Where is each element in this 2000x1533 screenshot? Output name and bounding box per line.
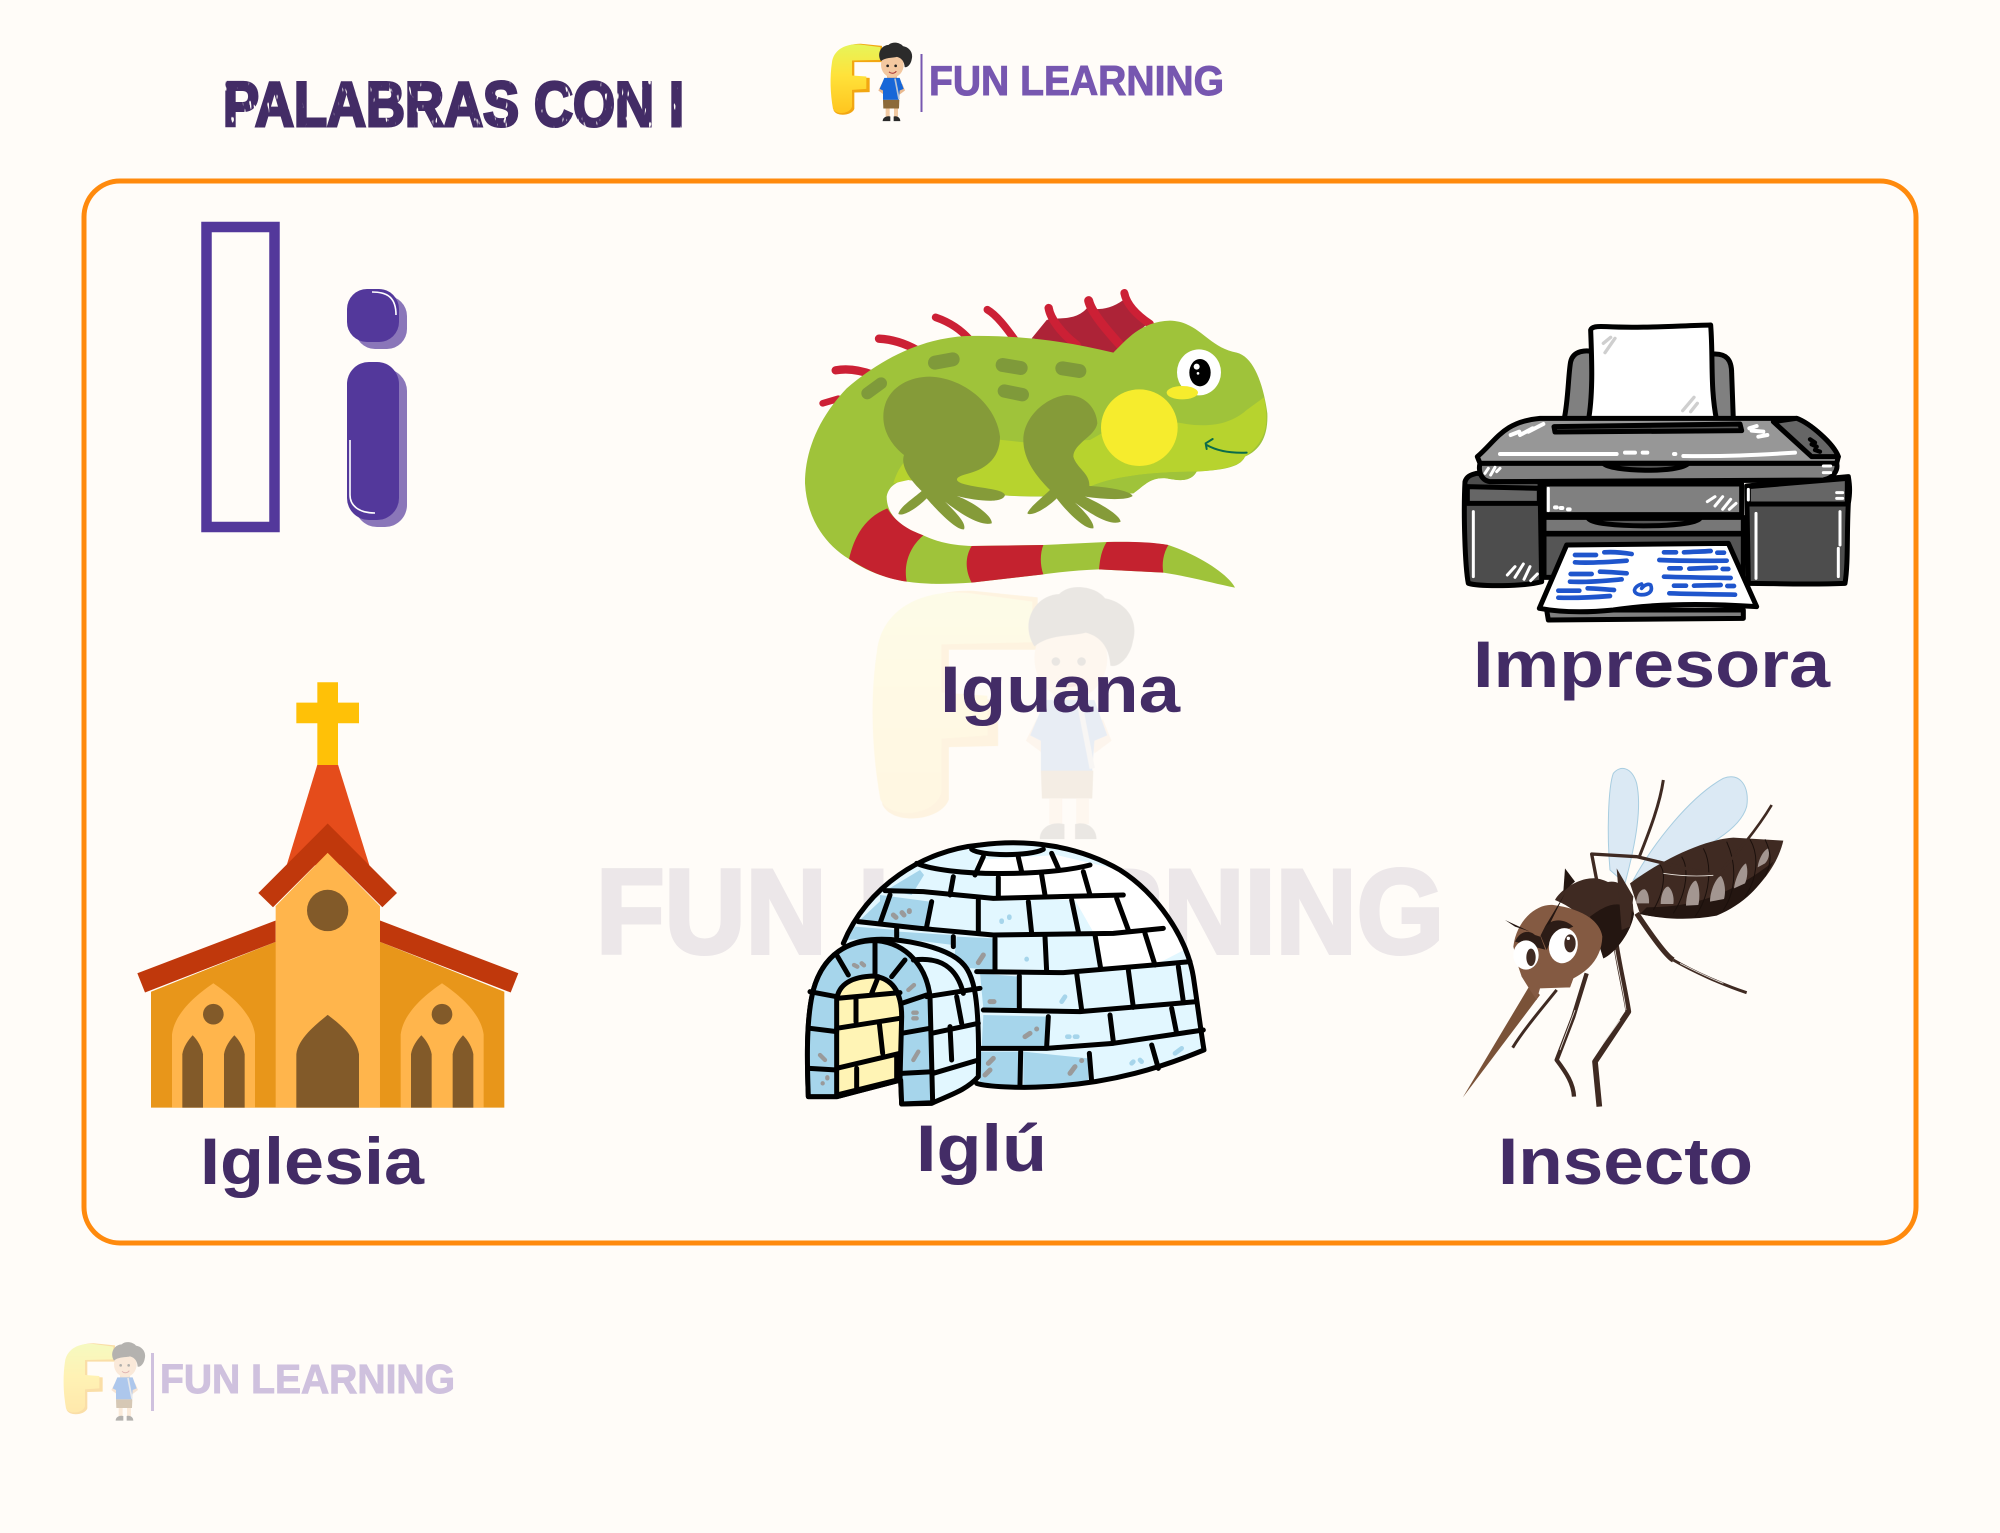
label: Insecto: Insecto bbox=[1498, 1124, 1753, 1198]
logo text: FUN LEARNING bbox=[929, 57, 1224, 104]
logo: header bbox=[831, 43, 1224, 121]
watermark bbox=[596, 587, 1444, 979]
icon: printer bbox=[1464, 325, 1850, 620]
title: PALABRAS CON I bbox=[223, 70, 684, 140]
logo divider bbox=[920, 54, 922, 112]
letter: uppercase I outline bbox=[206, 227, 274, 527]
label: Iglesia: Iglesia bbox=[200, 1124, 425, 1198]
icon: church bbox=[137, 682, 518, 1108]
label: Iguana: Iguana bbox=[940, 652, 1181, 726]
watermark text: FUN LEARNING bbox=[596, 845, 1444, 979]
icon: iguana bbox=[805, 293, 1267, 588]
letter: lowercase i bbox=[347, 289, 407, 527]
footer logo text: FUN LEARNING bbox=[160, 1356, 455, 1402]
logo icon bbox=[831, 43, 912, 121]
icon: mosquito bbox=[1463, 768, 1783, 1107]
label: Iglú: Iglú bbox=[916, 1111, 1047, 1185]
footer logo divider bbox=[151, 1353, 154, 1411]
icon: igloo bbox=[807, 843, 1204, 1104]
watermark icon bbox=[873, 587, 1134, 839]
logo: footer watermark bbox=[64, 1342, 455, 1421]
panel: main frame bbox=[84, 181, 1916, 1243]
footer logo icon bbox=[64, 1342, 145, 1421]
label: Impresora: Impresora bbox=[1473, 627, 1831, 701]
